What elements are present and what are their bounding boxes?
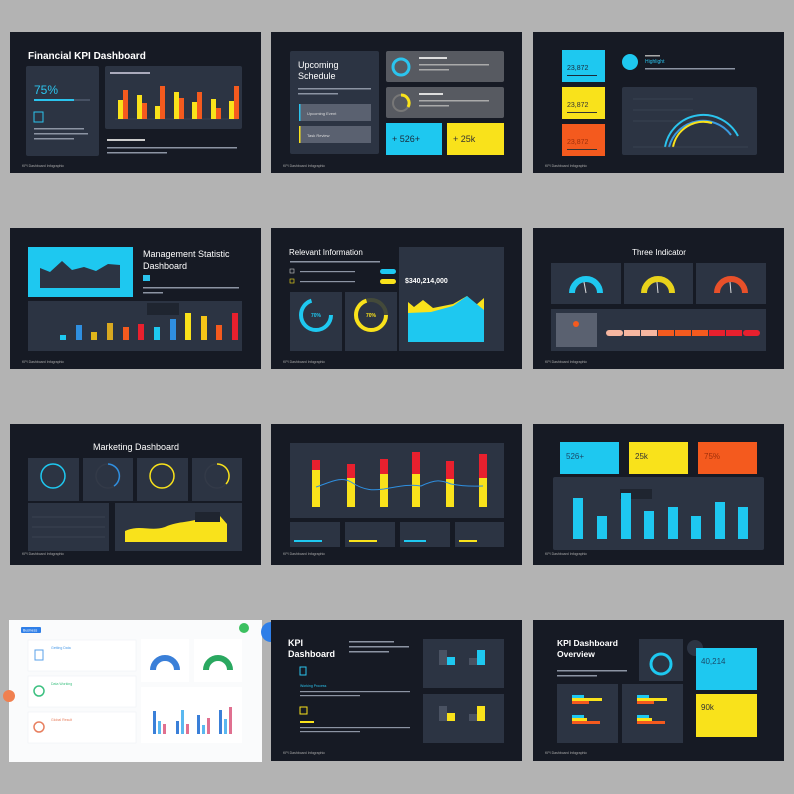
slide 9: cards and weekly bars (533, 424, 784, 565)
slide 3: gauge KPI: KPI Dashboard Infographic (545, 164, 587, 168)
slide 4: Management Statistic Dashboard: KPI Dashboard Infographic (22, 360, 64, 364)
title: Three Indicator (632, 248, 686, 257)
chart panel cyan (423, 639, 504, 688)
slide 9: cards and weekly bars: KPI Dashboard Infographic (545, 552, 587, 556)
slide 7: Marketing Dashboard: KPI Dashboard Infographic (22, 552, 64, 556)
bar chart (105, 66, 242, 129)
slide 10: light business dashboard (3, 620, 281, 762)
panel: 75% (26, 66, 99, 156)
card: gauge (386, 87, 504, 118)
gauge 3 (696, 263, 766, 304)
header text (645, 55, 735, 70)
slide 8: stacked bar chart (271, 424, 522, 565)
slide 6: Three Indicator (533, 228, 784, 369)
bar chart (141, 687, 242, 743)
area chart panel (28, 247, 133, 297)
gauges (141, 639, 242, 682)
slide 12: KPI Dashboard Overview: KPI Dashboard Infographic (545, 751, 587, 755)
stat cards: 23,872 (567, 102, 589, 109)
slide 3: gauge KPI (533, 32, 784, 173)
title: Management Statistic (143, 249, 230, 259)
donut yellow: 70% (366, 313, 377, 319)
card 90k (696, 694, 757, 737)
header text: Highlight (645, 59, 665, 65)
footer: KPI Dashboard Infographic (22, 164, 64, 168)
slide 1: Financial KPI Dashboard (10, 32, 261, 173)
icon (687, 640, 703, 656)
area chart panel: $340,214,000 (405, 278, 448, 285)
progress panel (551, 309, 766, 351)
card: 25k (447, 123, 504, 155)
slide 11: KPI Dashboard: KPI Dashboard Infographic (283, 751, 325, 755)
item 1: Working Process (300, 684, 327, 688)
donut cyan (290, 292, 342, 351)
bar chart (28, 301, 242, 351)
panel: schedule: Upcoming (298, 60, 339, 70)
feature cards: Data Working (51, 682, 72, 686)
feature cards (28, 640, 136, 743)
card: 526+ (386, 123, 442, 155)
card: donut (386, 51, 504, 82)
tag: Business (23, 628, 37, 632)
bottom boxes (290, 522, 504, 547)
gauge 2 (624, 263, 693, 304)
slide 11: KPI Dashboard (271, 620, 522, 761)
area chart panel (399, 247, 504, 351)
panel: 75%: 75% (34, 83, 58, 97)
donut panel (639, 639, 683, 681)
slide 7: Marketing Dashboard (10, 424, 261, 565)
slide 12: KPI Dashboard Overview (533, 620, 784, 761)
card: 25k: + 25k (453, 134, 476, 144)
donut cyan: 70% (311, 313, 322, 319)
kpi cards: 25k (635, 452, 649, 461)
panel: schedule: Upcoming Event (307, 111, 337, 116)
panel: schedule: Task Review (307, 133, 330, 138)
slide 5: Relevant Information: KPI Dashboard Infographic (283, 360, 325, 364)
panel: schedule (290, 51, 379, 154)
horizontal bar panels (557, 684, 683, 743)
stat cards: 23,872 (567, 65, 589, 72)
list items (290, 269, 396, 284)
feature cards: Getting Data (51, 646, 71, 650)
decorative circles (239, 623, 249, 633)
stat cards (562, 50, 605, 156)
feature cards: Global Result (51, 718, 72, 722)
card 40,214 (696, 648, 757, 690)
chart panel yellow (423, 694, 504, 743)
title: Relevant Information (289, 248, 363, 257)
slide 6: Three Indicator: KPI Dashboard Infographic (545, 360, 587, 364)
card 90k: 90k (701, 703, 715, 712)
icon: circle (622, 54, 638, 70)
kpi cards: 526+ (566, 452, 584, 461)
title: Financial KPI Dashboard (28, 51, 146, 62)
gauge 1 (551, 263, 621, 304)
kpi cards (560, 442, 757, 474)
tag (21, 627, 41, 633)
item 1 (300, 667, 410, 696)
item 2 (300, 707, 410, 732)
panel: arc gauge (622, 87, 757, 155)
table panel (28, 503, 109, 551)
slide 4: Management Statistic Dashboard (10, 228, 261, 369)
slide 12: KPI Dashboard Overview: Overview (557, 649, 595, 659)
title: KPI Dashboard (557, 638, 618, 648)
slide 2: Upcoming Schedule (271, 32, 522, 173)
donut panels (28, 458, 242, 501)
stacked bar chart (290, 443, 504, 518)
card: 526+: + 526+ (392, 134, 420, 144)
donut yellow (345, 292, 397, 351)
icon (143, 275, 150, 281)
slide 2: Upcoming Schedule: KPI Dashboard Infographic (283, 164, 325, 168)
area panel (115, 503, 242, 551)
slide 8: stacked bar chart: KPI Dashboard Infographic (283, 552, 325, 556)
text block (107, 139, 237, 154)
stat cards: 23,872 (567, 139, 589, 146)
kpi cards: 75% (704, 452, 720, 461)
slide 4: Management Statistic Dashboard: Dashboard (143, 261, 187, 271)
panel: schedule: Schedule (298, 71, 336, 81)
slide 11: KPI Dashboard: Dashboard (288, 649, 335, 659)
slide 5: Relevant Information (271, 228, 522, 369)
card 40,214: 40,214 (701, 657, 726, 666)
title: Marketing Dashboard (93, 442, 179, 452)
title: KPI (288, 638, 303, 648)
bar chart (553, 477, 764, 550)
